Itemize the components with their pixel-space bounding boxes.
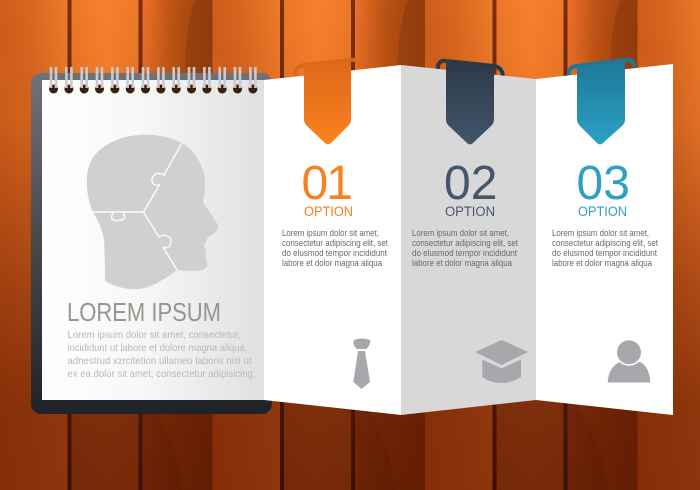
body text 2 (412, 228, 518, 268)
panel: option 3 (536, 60, 673, 415)
body text 3: labore et dolor magna aliqua (552, 258, 652, 268)
notebook body text: incididunt ut labore et dolore magna aliqua. (68, 342, 248, 354)
label option 2: OPTION (445, 204, 495, 219)
notebook body text: ex ea.dolor sit amet, consectetur adipisicing. (68, 368, 256, 380)
panel: option 1 (264, 60, 401, 415)
panel 3 sheet (536, 64, 673, 415)
panel: option 2 (401, 61, 536, 415)
spiral binding rings (49, 67, 257, 94)
body text 1: labore et dolor magna aliqua (282, 258, 382, 268)
notebook body text: adnestrud xzrcitetion ullameo laboris nisi ut (68, 355, 252, 367)
ribbon: dark slate (446, 61, 494, 144)
body text 1 (282, 228, 388, 268)
body text 2: labore et dolor magna aliqua (412, 258, 512, 268)
body text 1: Lorem ipsum dolor sit amet, (282, 228, 379, 238)
icon: person (608, 339, 650, 382)
body text 3: consectetur adipiscing elit, set (552, 238, 658, 248)
label option 1: OPTION (304, 204, 353, 219)
icon: graduation cap (475, 340, 528, 383)
head puzzle illustration (87, 135, 218, 289)
body text 2: consectetur adipiscing elit, set (412, 238, 518, 248)
icon: tie (353, 338, 370, 389)
body text 1: consectetur adipiscing elit, set (282, 238, 388, 248)
notebook heading: LOREM IPSUM (67, 297, 221, 327)
notebook page (42, 80, 264, 400)
body text 3: Lorem ipsum dolor sit amet, (552, 228, 649, 238)
panel 2 sheet (401, 65, 536, 415)
label option 3: OPTION (578, 204, 627, 219)
notebook body text (68, 329, 256, 380)
panel 1 sheet (264, 65, 401, 415)
number 02: 02 (444, 157, 497, 210)
notebook cover (31, 73, 272, 414)
number 01: 01 (302, 157, 351, 210)
ribbon: blue (577, 60, 625, 144)
notebook (31, 67, 272, 414)
notebook body text: Lorem ipsum dolor sit amet, consectetur, (68, 329, 240, 341)
body text 2: do elusmod tempor incididunt (412, 248, 517, 258)
number 03: 03 (576, 157, 630, 210)
ribbon: orange (304, 60, 351, 144)
body text 3 (552, 228, 658, 268)
body text 3: do elusmod tempor incididunt (552, 248, 657, 258)
ribbon loops behind panels (296, 60, 634, 78)
body text 1: do elusmod tempor incididunt (282, 248, 387, 258)
body text 2: Lorem ipsum dolor sit amet, (412, 228, 509, 238)
